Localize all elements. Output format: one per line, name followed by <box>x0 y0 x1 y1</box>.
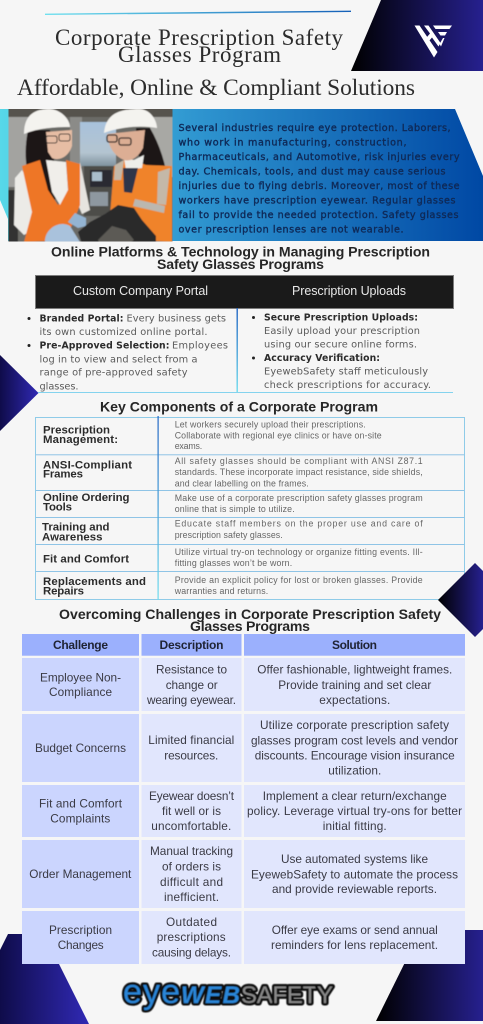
panel header: Custom Company Portal <box>73 284 208 298</box>
intro text: workers have prescription eyewear. Regular glasses <box>178 196 456 206</box>
column: custom company portal: Employees <box>172 341 228 352</box>
row: fit and comfort complaints: uncomfortable. <box>151 819 231 833</box>
row: online ordering tools <box>43 492 423 514</box>
table: key components <box>36 416 464 600</box>
decorative top rule <box>45 11 351 15</box>
row: budget concerns: Budget Concerns <box>35 741 126 755</box>
title: Corporate Prescription Safety <box>55 25 344 50</box>
row: prescription management <box>43 420 382 451</box>
row: prescription changes: Prescription <box>49 923 112 937</box>
row: budget concerns: Limited financial <box>148 733 234 747</box>
row: fit and comfort: fitting glasses won’t be worn. <box>175 558 292 568</box>
row: order management: of orders is <box>162 860 221 874</box>
worker photo <box>6 107 176 244</box>
column: custom company portal: Branded Portal: <box>40 313 124 324</box>
EyewebSafety logo: SAFETY <box>241 982 333 1009</box>
row: fit and comfort complaints: Eyewear doesn’t <box>149 789 235 803</box>
intro text: Several industries require eye protection. Laborers, <box>178 123 450 134</box>
row: online ordering tools: Online Ordering <box>43 492 130 504</box>
column: prescription uploads <box>252 313 431 391</box>
row: ANSI-compliant frames: and clear labelling on the frames. <box>175 478 309 488</box>
row: employee non-compliance: Employee Non- <box>40 670 121 684</box>
column: prescription uploads: check prescriptions for accuracy. <box>264 380 431 391</box>
row: replacements and repairs: Provide an explicit policy for lost or broken glasses. Provide <box>175 575 423 585</box>
EyewebSafety logo: eye <box>123 973 180 1011</box>
top-right navy panel with logo <box>351 0 483 71</box>
row: online ordering tools: Make use of a corporate prescription safety glasses program <box>175 493 423 503</box>
intro text: who work in manufacturing, construction, <box>178 138 406 148</box>
intro text: injuries due to flying debris. Moreover, most of these <box>178 181 460 192</box>
EyewebSafety logo: WEB <box>181 982 240 1009</box>
intro text: day. Chemicals, tools, and dust may cause serious <box>178 166 446 178</box>
row: prescription management: Management: <box>43 434 118 446</box>
row: replacements and repairs <box>43 575 423 598</box>
row: training and awareness <box>42 518 423 543</box>
row: training and awareness: Awareness <box>42 531 102 543</box>
row: prescription changes <box>22 911 465 964</box>
row: fit and comfort complaints <box>22 785 465 837</box>
table header: Solution <box>332 638 377 652</box>
heading: online platforms: Safety Glasses Programs <box>157 256 324 272</box>
column: custom company portal: its own customized online portal. <box>40 327 208 338</box>
intro text: Pharmaceuticals, and Automotive, risk injuries every <box>178 152 460 163</box>
row: order management: Manual tracking <box>150 844 233 858</box>
row: fit and comfort complaints: fit well or is <box>162 804 221 818</box>
heading: online platforms <box>51 244 430 272</box>
row: order management: difficult and <box>160 875 223 889</box>
column: custom company portal: log in to view and select from a <box>40 354 198 365</box>
table header: Description <box>160 638 224 652</box>
heading: key components: Key Components of a Corporate Program <box>100 398 378 414</box>
table header: Challenge <box>53 638 108 652</box>
row: employee non-compliance <box>22 658 465 711</box>
column: custom company portal: range of pre-approved safety <box>40 368 188 379</box>
row: prescription changes: reminders for lens replacement. <box>271 938 438 952</box>
row: ANSI-compliant frames: standards. These incorporate impact resistance, side shields, <box>175 467 423 477</box>
row: order management: Order Management <box>29 867 132 881</box>
left navy triangle <box>0 355 38 431</box>
row: fit and comfort <box>43 547 423 568</box>
intro text <box>178 123 460 236</box>
row: order management <box>22 840 465 908</box>
table: challenges <box>22 634 465 964</box>
icon: HC monogram logo <box>414 26 452 58</box>
intro text: fail to provide the needed protection. Safety glasses <box>178 210 459 221</box>
subtitle: Affordable, Online & Compliant Solutions <box>17 75 415 101</box>
heading: overcoming challenges: Overcoming Challenges in Corporate Prescription Safety <box>59 606 441 622</box>
row: training and awareness: prescription safety glasses. <box>175 530 283 540</box>
row: replacements and repairs: Repairs <box>43 586 84 598</box>
row: employee non-compliance: Provide training and set clear <box>278 678 431 692</box>
row: employee non-compliance: change or <box>166 678 218 692</box>
row: prescription management: Prescription <box>43 424 110 436</box>
row: fit and comfort complaints: Implement a clear return/exchange <box>263 789 447 803</box>
row: fit and comfort complaints: Fit and Comfort <box>39 797 123 811</box>
row: budget concerns <box>22 714 465 782</box>
row: replacements and repairs: Replacements and <box>43 576 146 588</box>
row: training and awareness: Educate staff members on the proper use and care of <box>175 518 423 528</box>
column: custom company portal: Pre-Approved Selection: <box>40 341 170 352</box>
right navy diamond <box>438 563 483 637</box>
row: prescription changes: Outdated <box>166 915 217 929</box>
column: prescription uploads: using our secure online forms. <box>264 339 417 350</box>
panel header <box>36 276 454 308</box>
row: fit and comfort complaints: initial fitting. <box>323 819 387 833</box>
intro text: over prescription lenses are not wearable. <box>178 224 404 236</box>
row: budget concerns: glasses program cost levels and vendor <box>251 733 458 747</box>
row: fit and comfort complaints: Complaints <box>50 811 110 825</box>
column: custom company portal <box>28 313 228 392</box>
equipment <box>78 205 156 244</box>
row: employee non-compliance: expectations. <box>319 693 390 707</box>
title <box>55 25 344 67</box>
intro band <box>0 107 483 244</box>
row: employee non-compliance: wearing eyewear. <box>146 693 236 707</box>
row: prescription changes: Offer eye exams or send annual <box>272 923 438 937</box>
row: fit and comfort: Utilize virtual try-on technology or organize fitting events. Ill- <box>175 547 423 557</box>
row: online ordering tools: online that is simple to utilize. <box>175 504 295 514</box>
row: order management: EyewebSafety to automate the process <box>251 867 458 881</box>
heading: overcoming challenges <box>59 606 441 634</box>
column: custom company portal: glasses. <box>40 381 78 392</box>
right worker <box>104 109 172 242</box>
column: prescription uploads: Accuracy Verification: <box>264 353 380 364</box>
row: order management: Use automated systems like <box>281 852 428 866</box>
panel header: Prescription Uploads <box>292 284 406 298</box>
title: Glasses Program <box>118 42 281 67</box>
row: training and awareness: Training and <box>42 521 110 533</box>
EyewebSafety logo <box>123 973 333 1011</box>
row: prescription changes: causing delays. <box>152 946 231 960</box>
heading: overcoming challenges: Glasses Programs <box>190 618 310 634</box>
row: fit and comfort complaints: policy. Leverage virtual try-ons for better <box>247 804 462 818</box>
column: custom company portal: Every business gets <box>126 313 226 324</box>
row: budget concerns: resources. <box>164 749 218 763</box>
row: ANSI-compliant frames <box>43 456 423 488</box>
row: prescription management: Let workers securely upload their prescriptions. <box>175 420 366 430</box>
left worker <box>14 109 90 242</box>
row: ANSI-compliant frames: ANSI-Compliant <box>43 459 132 471</box>
row: order management: inefficient. <box>164 890 219 904</box>
table header <box>22 634 465 656</box>
heading: online platforms: Online Platforms & Technology in Managing Prescription <box>51 244 430 260</box>
row: prescription changes: Changes <box>58 938 104 952</box>
row: replacements and repairs: warranties and returns. <box>174 586 268 596</box>
row: prescription changes: prescriptions <box>157 930 226 944</box>
row: order management: and provide reviewable reports. <box>272 882 437 896</box>
row: ANSI-compliant frames: All safety glasses should be compliant with ANSI Z87.1 <box>175 456 423 466</box>
bottom-left navy shape <box>0 934 89 1024</box>
row: fit and comfort: Fit and Comfort <box>43 554 129 566</box>
row: employee non-compliance: Compliance <box>49 685 112 699</box>
column: prescription uploads: EyewebSafety staff meticulously <box>264 366 428 377</box>
row: budget concerns: Utilize corporate prescription safety <box>260 718 449 732</box>
row: ANSI-compliant frames: Frames <box>43 469 83 481</box>
row: prescription management: exams. <box>175 441 202 451</box>
row: prescription management: Collaborate with regional eye clinics or have on-site <box>175 430 382 440</box>
row: budget concerns: discounts. Encourage vision insurance <box>255 749 455 763</box>
column: prescription uploads: Secure Prescription Uploads: <box>264 313 418 324</box>
row: employee non-compliance: Offer fashionable, lightweight frames. <box>257 662 452 676</box>
column: prescription uploads: Easily upload your prescription <box>264 326 420 337</box>
row: budget concerns: utilization. <box>328 763 381 777</box>
panel: portal and uploads <box>28 276 454 393</box>
row: employee non-compliance: Resistance to <box>156 662 227 676</box>
row: online ordering tools: Tools <box>43 501 72 513</box>
bottom-right navy shape <box>376 930 483 1021</box>
